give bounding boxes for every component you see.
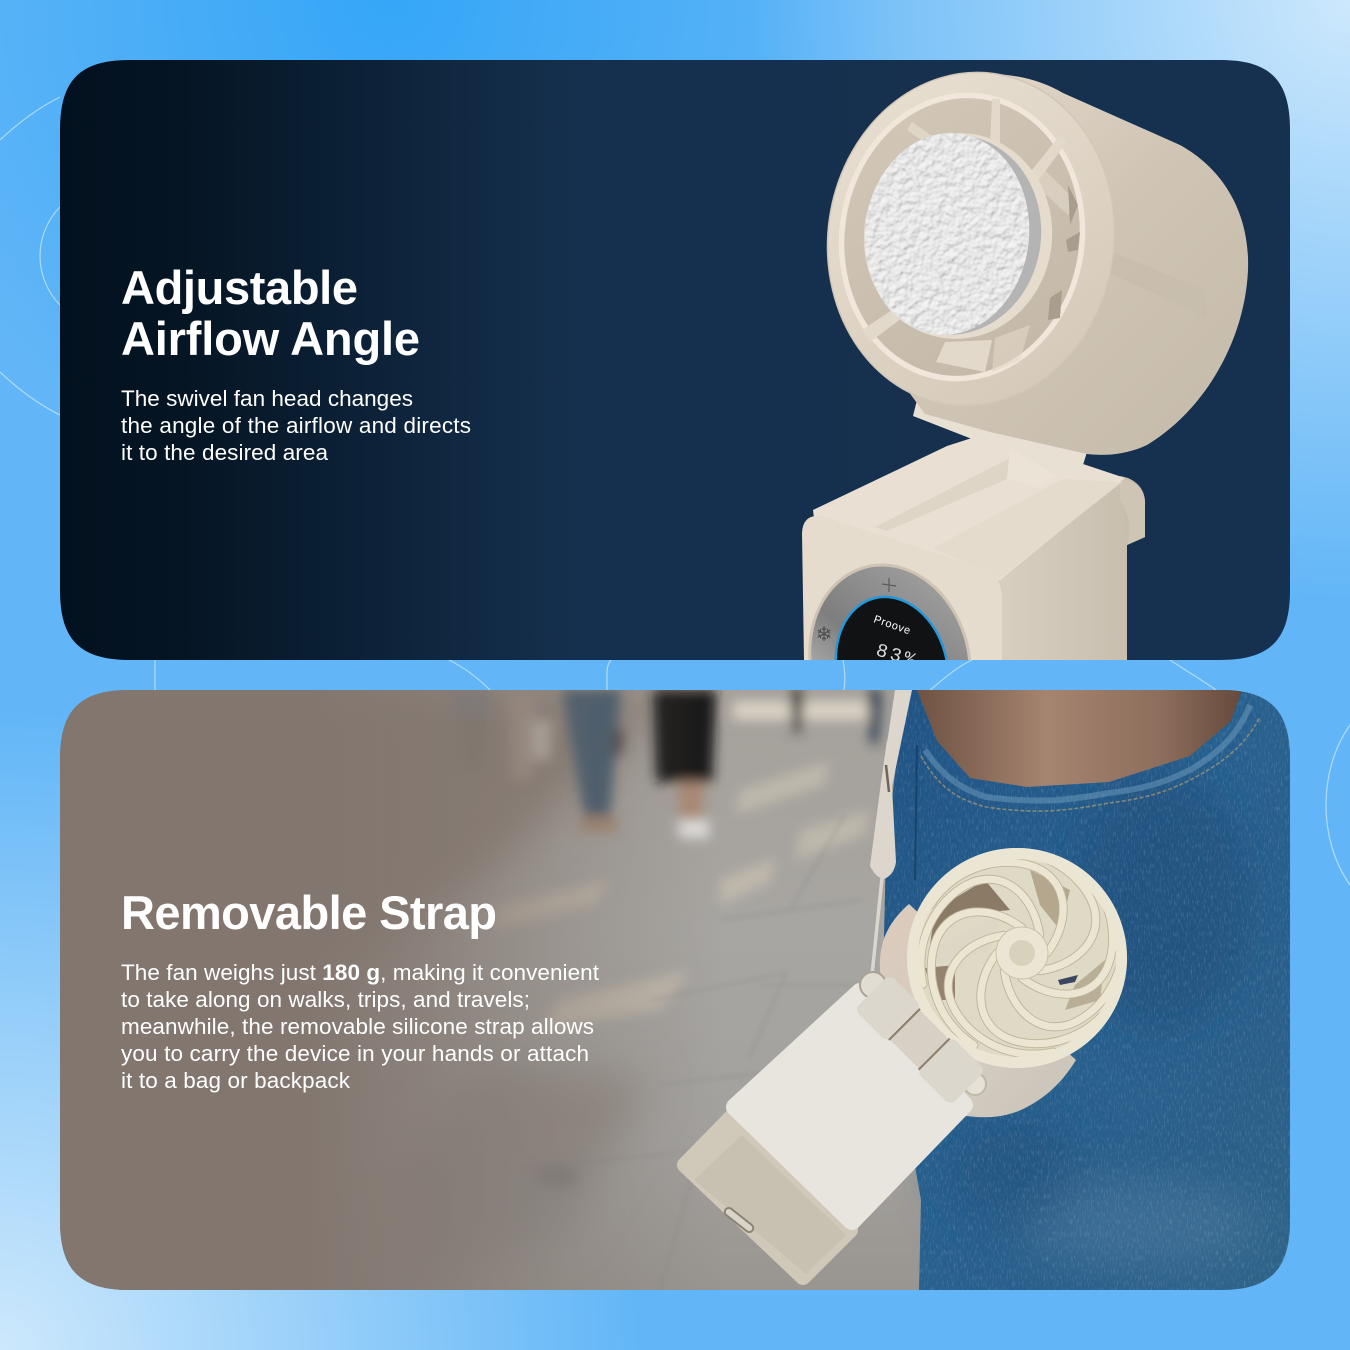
text block: swivel description: the angle of the airflow and directs <box>121 413 471 438</box>
fan base <box>802 437 1145 660</box>
fan with swirl grille <box>880 848 1127 1118</box>
text block: swivel description: it to the desired area <box>121 440 328 465</box>
hinge <box>854 972 986 1106</box>
label: battery digits: 83% <box>873 640 918 672</box>
usb-c port <box>723 1206 755 1234</box>
text block: strap description: meanwhile, the removable silicone strap allows <box>121 1014 594 1039</box>
text block: swivel description <box>121 386 471 465</box>
heading: removable strap: Removable Strap <box>121 886 497 939</box>
heading: adjustable airflow angle <box>121 261 420 365</box>
panel: removable strap <box>60 680 1290 1300</box>
text block: strap description <box>121 960 600 1093</box>
text block: swivel description: The swivel fan head changes <box>121 386 413 411</box>
heading: adjustable airflow angle: Airflow Angle <box>121 312 420 365</box>
hand in pocket <box>917 690 1242 787</box>
text block: strap description: The fan weighs just 180 g, making it convenient <box>121 960 600 985</box>
fade into panel colour <box>60 690 720 1290</box>
label: brand name: Proove <box>872 613 912 637</box>
heading: adjustable airflow angle: Adjustable <box>121 261 358 314</box>
control dial <box>808 564 971 660</box>
text block: strap description: to take along on walks, trips, and travels; <box>121 987 530 1012</box>
jeans <box>884 690 1290 1290</box>
illustration: swivel fan <box>802 72 1248 660</box>
water drop disc <box>864 133 1030 335</box>
text block: strap description: it to a bag or backpack <box>121 1068 351 1093</box>
strap <box>870 690 912 975</box>
panel: adjustable airflow angle <box>60 60 1290 660</box>
fan head <box>826 72 1248 464</box>
lifestyle photo <box>60 680 1290 1300</box>
power bank body <box>685 992 964 1277</box>
text block: strap description: you to carry the device in your hands or attach <box>121 1041 589 1066</box>
blurred street <box>382 690 921 1290</box>
label: snowflake button: ❄ <box>816 622 832 646</box>
